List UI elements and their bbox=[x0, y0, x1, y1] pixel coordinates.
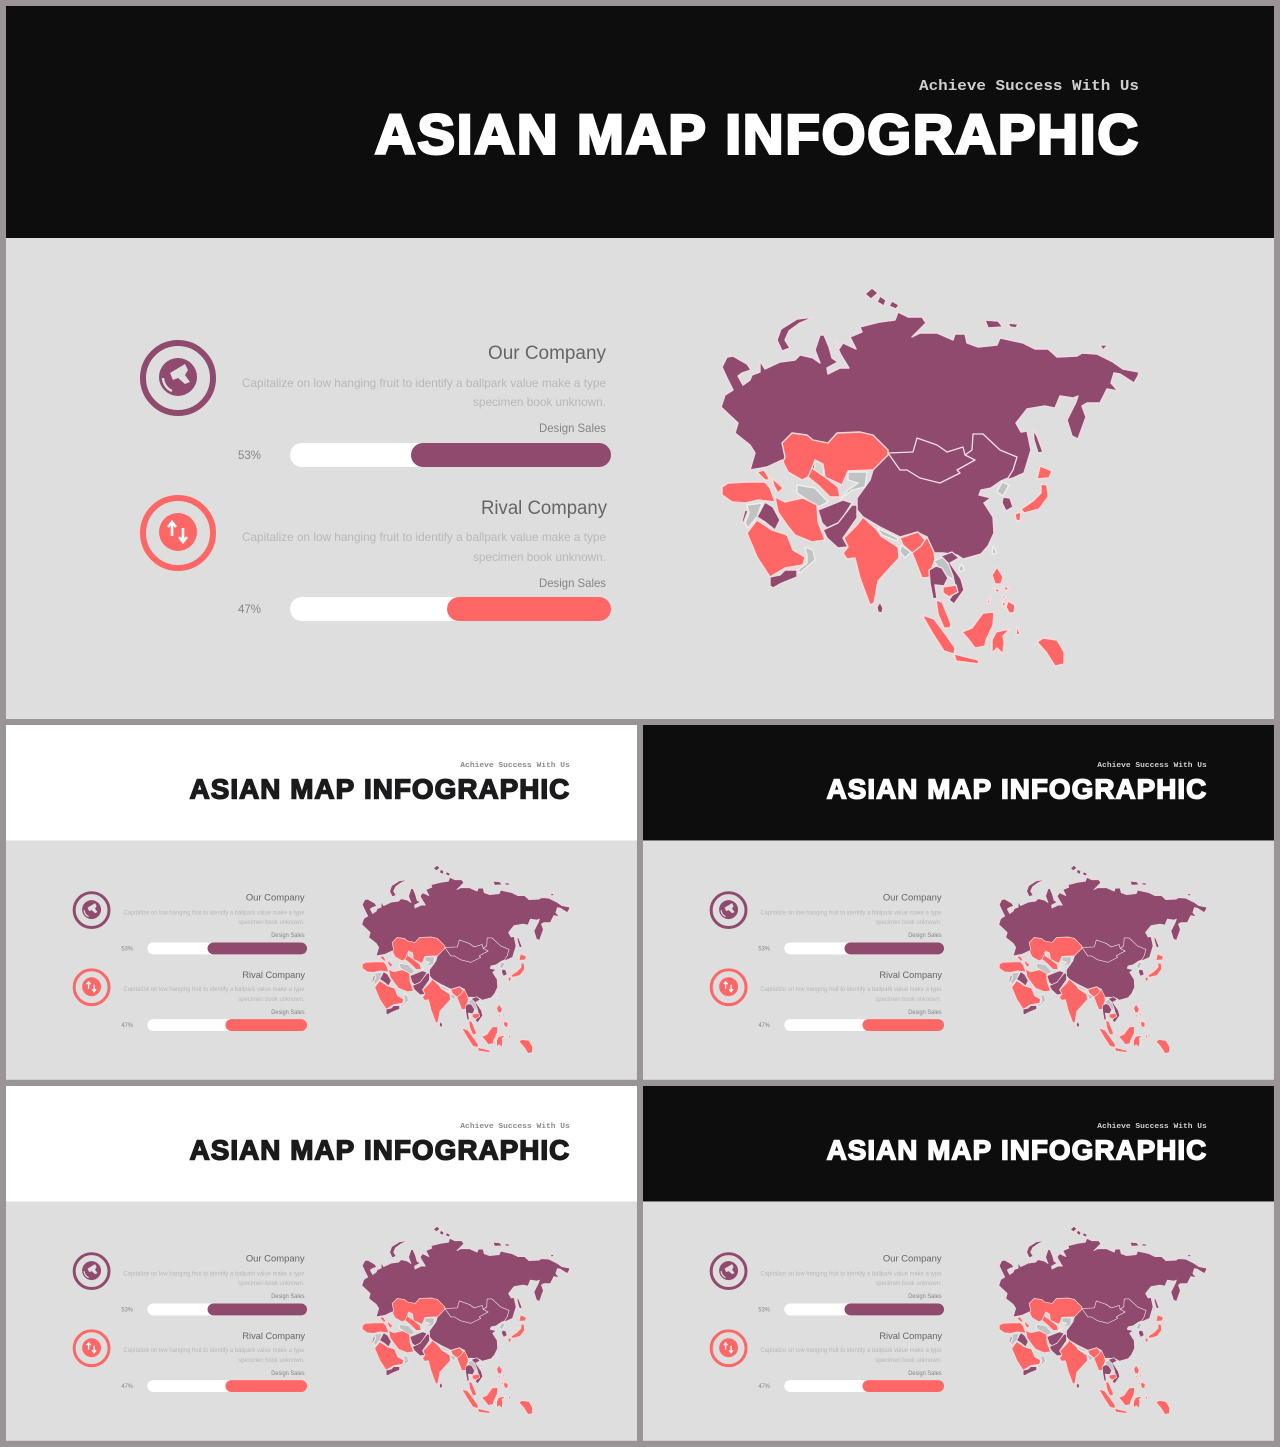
heading: rival company: Rival Company bbox=[481, 498, 607, 519]
panel: slide white top-left: 47% bbox=[121, 1023, 134, 1029]
panel: slide white top-left: Achieve Success With Us bbox=[460, 762, 570, 770]
nepal bbox=[877, 528, 898, 541]
panel: slide white top-left: Design Sales bbox=[271, 933, 305, 939]
panel: slide white bottom-left: Design Sales bbox=[271, 1294, 305, 1300]
thailand bbox=[929, 566, 948, 599]
panel: slide dark top-right: specimen book unknown. bbox=[875, 920, 942, 926]
panel: slide dark top-right: Design Sales bbox=[908, 933, 942, 939]
pakistan bbox=[823, 505, 857, 548]
panel: slide dark bottom-right: specimen book unknown. bbox=[875, 1358, 942, 1364]
sakhalin bbox=[1033, 430, 1043, 453]
korea bbox=[997, 482, 1009, 496]
panel: slide dark top-right: Achieve Success With Us bbox=[1097, 762, 1207, 770]
turkey bbox=[722, 482, 775, 503]
panel: slide white bottom-left: Achieve Success With Us bbox=[460, 1123, 570, 1131]
levant bbox=[745, 503, 762, 528]
panel: slide dark bottom-right: 47% bbox=[758, 1384, 771, 1390]
panel: slide dark top-right: 53% bbox=[758, 946, 771, 952]
panel: slide dark top-right: Our Company bbox=[883, 893, 942, 904]
sri lanka bbox=[877, 602, 883, 613]
panel: main slide bbox=[6, 6, 1274, 719]
india bbox=[843, 517, 899, 605]
panel: slide dark bottom-right: Rival Company bbox=[879, 1331, 942, 1342]
philippines bbox=[987, 567, 1015, 613]
panel: slide white bottom-left: Capitalize on low hanging fruit to identify a ballpark value make a type bbox=[123, 1348, 305, 1354]
mongolia and manchuria borders bbox=[888, 434, 1017, 483]
laos bbox=[934, 557, 954, 580]
japan bbox=[1015, 466, 1052, 521]
description: rival company bbox=[242, 530, 606, 564]
vietnam bbox=[941, 552, 964, 604]
panel: slide white bottom-left: 53% bbox=[121, 1307, 134, 1313]
panel: slide dark bottom-right: specimen book unknown. bbox=[875, 1281, 942, 1287]
description: our company: specimen book unknown. bbox=[473, 395, 606, 409]
panel: slide dark top-right bbox=[643, 725, 1274, 1080]
panel: slide white top-left: Design Sales bbox=[271, 1010, 305, 1016]
yemen bbox=[770, 570, 797, 588]
panel: slide dark top-right: ASIAN MAP INFOGRAPHIC bbox=[827, 773, 1206, 804]
label: design sales: Design Sales bbox=[539, 421, 606, 435]
saudi arabia bbox=[747, 520, 805, 577]
panel: slide dark top-right: Capitalize on low hanging fruit to identify a ballpark value make a type bbox=[760, 987, 942, 993]
value: 53%: 53% bbox=[238, 448, 261, 462]
panel: slide dark bottom-right: Design Sales bbox=[908, 1371, 942, 1377]
header band bbox=[6, 6, 1274, 238]
panel: slide white bottom-left bbox=[6, 1086, 637, 1441]
description: rival company: Capitalize on low hanging fruit to identify a ballpark value make a type bbox=[242, 530, 606, 544]
progress bar: 53% bbox=[290, 443, 611, 467]
title: ASIAN MAP INFOGRAPHIC bbox=[375, 102, 1138, 166]
panel: slide white top-left: 53% bbox=[121, 946, 134, 952]
panel: slide white top-left: Our Company bbox=[246, 893, 305, 904]
icon: arrows bbox=[143, 498, 213, 568]
panel: slide dark top-right: Rival Company bbox=[879, 970, 942, 981]
description: our company: Capitalize on low hanging fruit to identify a ballpark value make a type bbox=[242, 376, 606, 390]
arctic islands bbox=[777, 288, 1108, 351]
cambodia bbox=[943, 585, 958, 597]
oman bbox=[798, 547, 815, 573]
label: design sales: Design Sales bbox=[539, 576, 606, 590]
panel: slide white bottom-left: ASIAN MAP INFOGRAPHIC bbox=[190, 1134, 569, 1165]
description: rival company: specimen book unknown. bbox=[473, 550, 606, 564]
central asia bbox=[808, 468, 840, 497]
panel: slide dark top-right: Design Sales bbox=[908, 1010, 942, 1016]
panel: slide dark bottom-right: Design Sales bbox=[908, 1294, 942, 1300]
panel: slide dark bottom-right bbox=[643, 1086, 1274, 1441]
panel: slide white bottom-left: specimen book unknown. bbox=[238, 1281, 305, 1287]
description: our company bbox=[242, 376, 606, 409]
panel: slide white bottom-left: Design Sales bbox=[271, 1371, 305, 1377]
russia and china silhouette bbox=[721, 312, 1139, 559]
kazakhstan bbox=[782, 432, 888, 485]
value: 47%: 47% bbox=[238, 602, 261, 616]
panel: slide white top-left: specimen book unknown. bbox=[238, 920, 305, 926]
myanmar bbox=[912, 537, 935, 578]
panel: slide white bottom-left: Rival Company bbox=[242, 1331, 305, 1342]
panel: slide dark bottom-right: Capitalize on low hanging fruit to identify a ballpark value make a type bbox=[760, 1272, 942, 1278]
panel: slide white top-left: specimen book unknown. bbox=[238, 997, 305, 1003]
panel: slide white top-left: ASIAN MAP INFOGRAPHIC bbox=[190, 773, 569, 804]
panel: slide white top-left bbox=[6, 725, 637, 1080]
iran bbox=[775, 497, 825, 542]
panel: slide dark top-right: 47% bbox=[758, 1023, 771, 1029]
panel: slide dark bottom-right: 53% bbox=[758, 1307, 771, 1313]
panel: slide dark bottom-right: Achieve Success With Us bbox=[1097, 1123, 1207, 1131]
progress bar: 47% bbox=[290, 597, 611, 621]
iraq bbox=[757, 502, 780, 530]
panel: slide white top-left: Capitalize on low hanging fruit to identify a ballpark value make a type bbox=[123, 987, 305, 993]
panel: slide dark bottom-right: Our Company bbox=[883, 1254, 942, 1265]
icon: globe bbox=[143, 343, 213, 413]
panel: slide dark bottom-right: ASIAN MAP INFOGRAPHIC bbox=[827, 1134, 1206, 1165]
afghanistan bbox=[818, 500, 852, 528]
panel: slide dark bottom-right: Capitalize on low hanging fruit to identify a ballpark value make a type bbox=[760, 1348, 942, 1354]
panel: slide white top-left: Capitalize on low hanging fruit to identify a ballpark value make a type bbox=[123, 911, 305, 917]
aral sea bbox=[814, 461, 824, 476]
panel: slide dark top-right: Capitalize on low hanging fruit to identify a ballpark value make a type bbox=[760, 911, 942, 917]
indonesia and malaysia bbox=[922, 600, 1064, 666]
panel: slide white bottom-left: Capitalize on low hanging fruit to identify a ballpark value make a type bbox=[123, 1272, 305, 1278]
panel: slide dark top-right: specimen book unknown. bbox=[875, 997, 942, 1003]
panel: slide white bottom-left: 47% bbox=[121, 1384, 134, 1390]
bangladesh bbox=[900, 545, 911, 558]
heading: our company: Our Company bbox=[488, 343, 606, 364]
panel: slide white bottom-left: Our Company bbox=[246, 1254, 305, 1265]
panel: slide white top-left: Rival Company bbox=[242, 970, 305, 981]
panel: slide white bottom-left: specimen book unknown. bbox=[238, 1358, 305, 1364]
map: asia bbox=[721, 288, 1139, 666]
taiwan and hainan bbox=[959, 546, 997, 572]
caucasus bbox=[757, 470, 770, 480]
subtitle: Achieve Success With Us bbox=[919, 78, 1139, 95]
